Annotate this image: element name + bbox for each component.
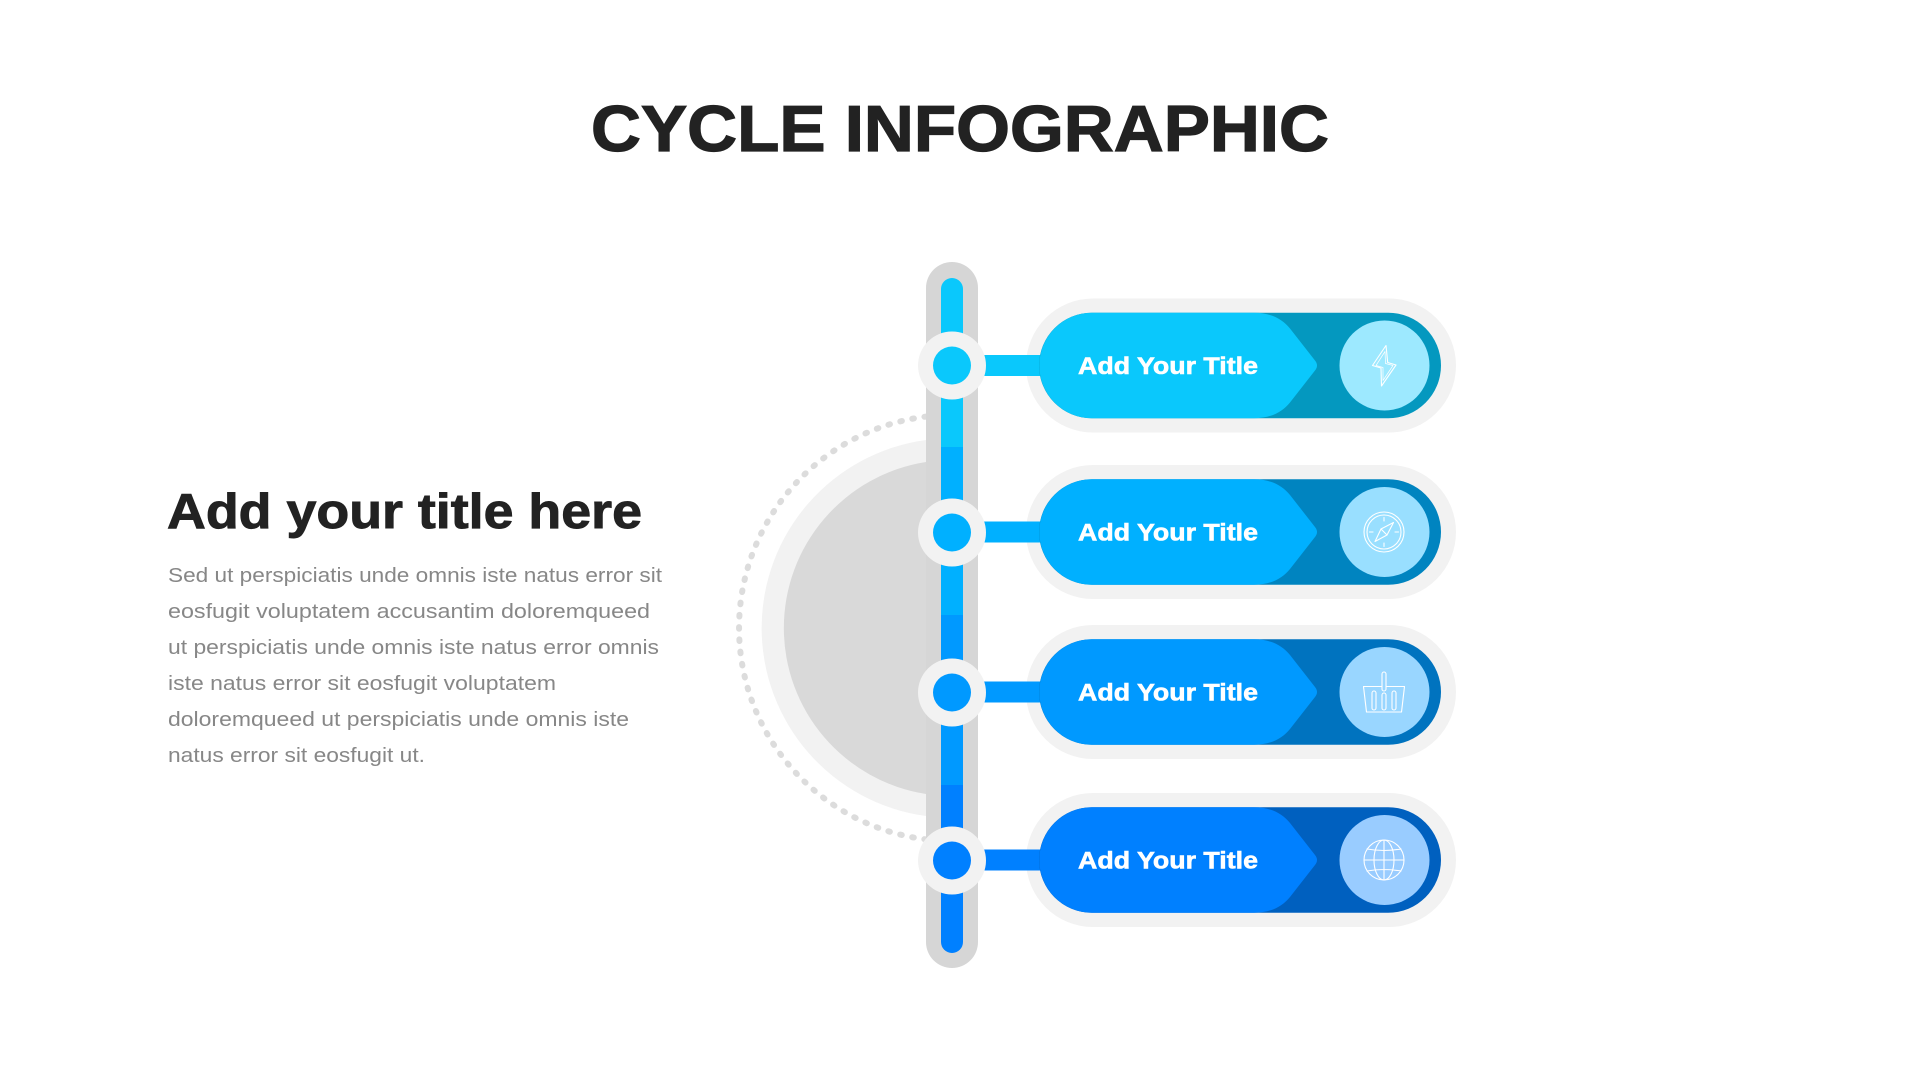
row 4: globe: Add Your Title [1078, 848, 1258, 874]
paragraph: doloremqueed ut perspiciatis unde omnis iste [168, 708, 629, 731]
paragraph: natus error sit eosfugit ut. [168, 744, 425, 767]
row 1: lightning [918, 298, 1456, 432]
title: CYCLE INFOGRAPHIC [591, 92, 1329, 165]
vertical track [926, 262, 978, 968]
row 1: lightning: Add Your Title [1078, 353, 1258, 380]
row 3: basket [918, 625, 1456, 759]
paragraph [168, 564, 662, 767]
row 2: compass: Add Your Title [1078, 520, 1258, 546]
paragraph: iste natus error sit eosfugit voluptatem [168, 672, 556, 695]
row 2: compass [918, 465, 1456, 599]
row 3: basket: Add Your Title [1078, 680, 1258, 706]
paragraph: Sed ut perspiciatis unde omnis iste natus error sit [168, 564, 662, 587]
row 4: globe [918, 793, 1456, 927]
paragraph: eosfugit voluptatem accusantim doloremqueed [168, 600, 650, 623]
heading: Add your title here [167, 484, 642, 539]
paragraph: ut perspiciatis unde omnis iste natus error omnis [168, 636, 659, 659]
half circle backdrop [739, 417, 926, 839]
text block: left description [167, 484, 662, 767]
